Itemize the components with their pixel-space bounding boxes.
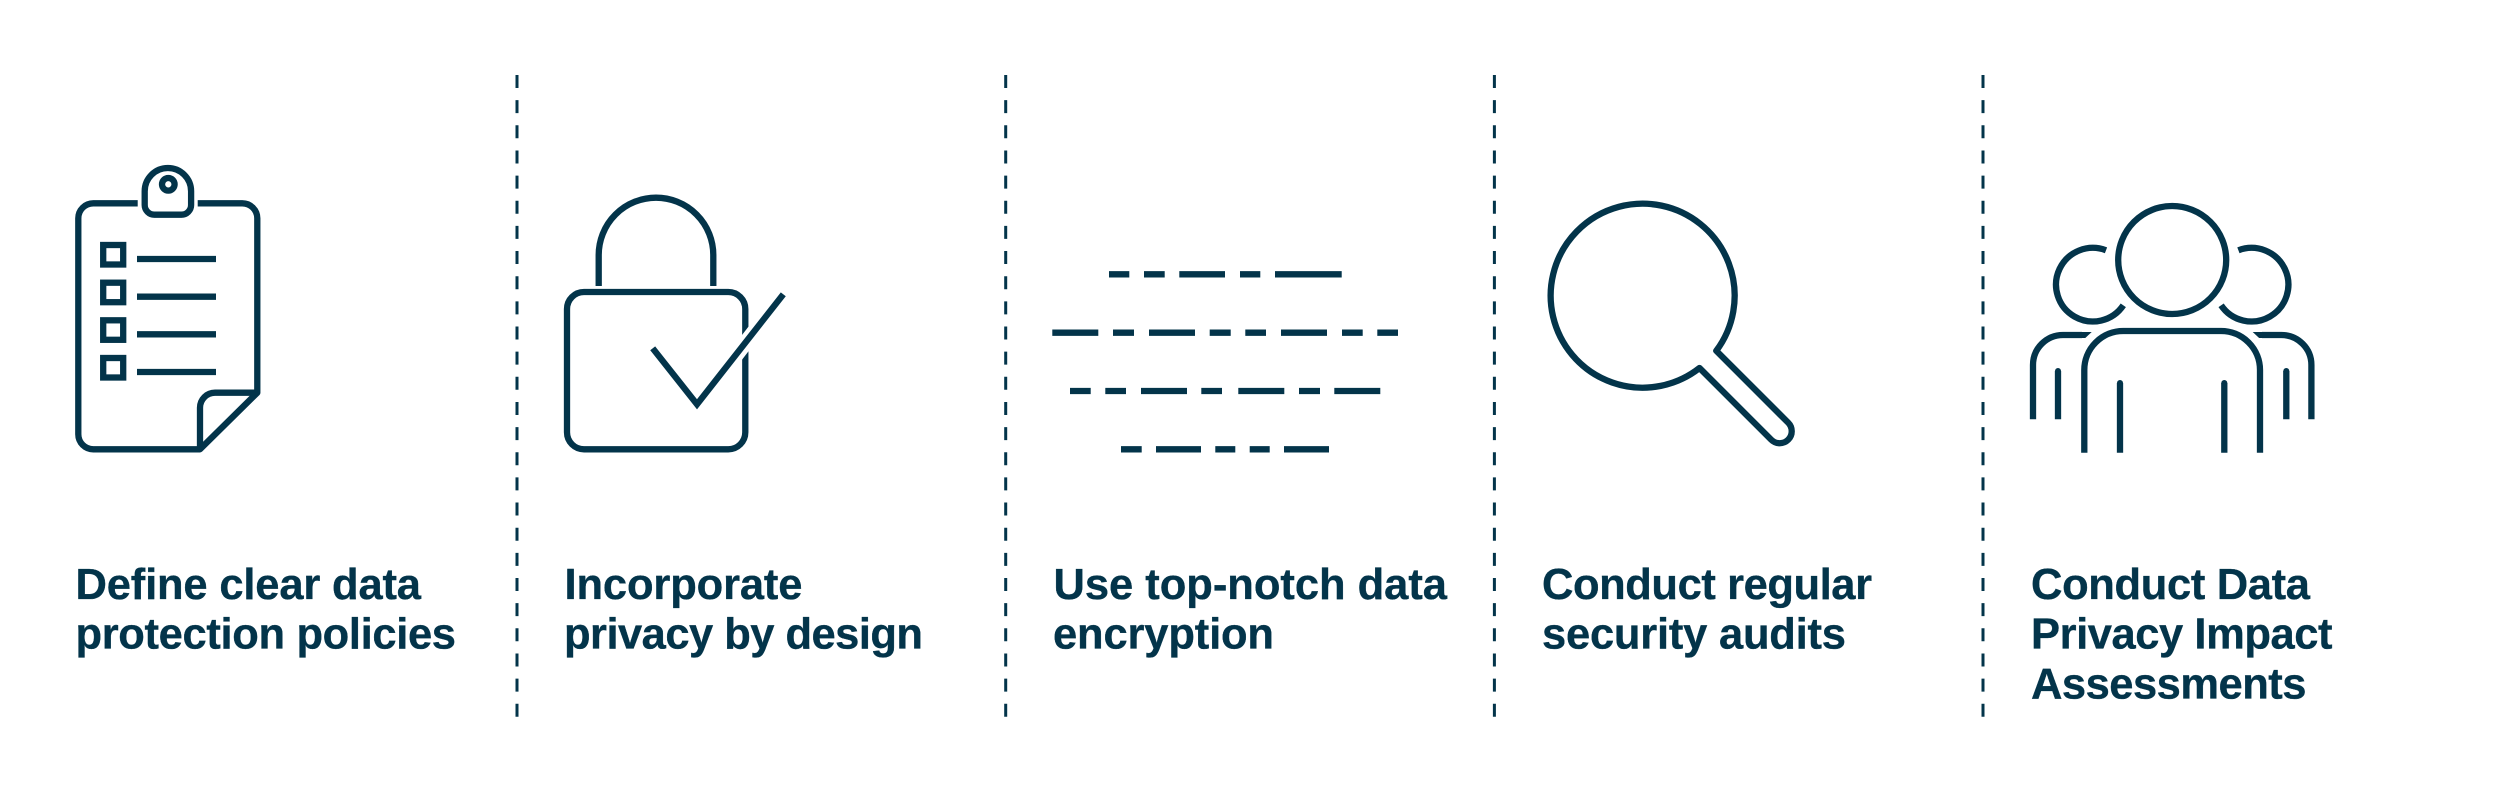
- panel: use top-notch data encryption: [1052, 274, 1448, 658]
- heading: incorporate privacy by design: Incorporate: [564, 561, 802, 609]
- icon: magnifying glass: [1551, 204, 1792, 443]
- panel: define clear data protection policies: [76, 168, 456, 658]
- heading: conduct data privacy impact assessments: Assessments: [2031, 660, 2306, 708]
- panel: conduct data privacy impact assessments: [2031, 206, 2332, 708]
- heading: incorporate privacy by design: [564, 561, 923, 658]
- heading: conduct data privacy impact assessments: [2031, 561, 2332, 708]
- heading: use top-notch data encryption: [1053, 561, 1448, 658]
- heading: use top-notch data encryption: Use top-notch data: [1054, 561, 1448, 609]
- heading: define clear data protection policies: [76, 561, 456, 658]
- heading: use top-notch data encryption: encryption: [1053, 610, 1274, 658]
- heading: conduct data privacy impact assessments: Privacy Impact: [2031, 610, 2332, 658]
- icon: clipboard checklist: [78, 168, 257, 449]
- heading: conduct data privacy impact assessments: Conduct Data: [2031, 561, 2311, 609]
- heading: incorporate privacy by design: privacy by design: [564, 610, 923, 658]
- panel: conduct regular security audits: [1542, 204, 1872, 658]
- panel: incorporate privacy by design: [564, 198, 923, 658]
- icon: group of three people: [2033, 206, 2311, 453]
- icon: encrypted dashed lines: [1052, 274, 1398, 449]
- icon: padlock with check mark: [567, 198, 783, 449]
- heading: conduct regular security audits: Conduct regular: [1542, 561, 1872, 609]
- heading: define clear data protection policies: Define clear data: [76, 561, 422, 609]
- heading: conduct regular security audits: [1542, 561, 1872, 658]
- heading: define clear data protection policies: protection policies: [76, 610, 456, 658]
- heading: conduct regular security audits: security audits: [1542, 610, 1846, 658]
